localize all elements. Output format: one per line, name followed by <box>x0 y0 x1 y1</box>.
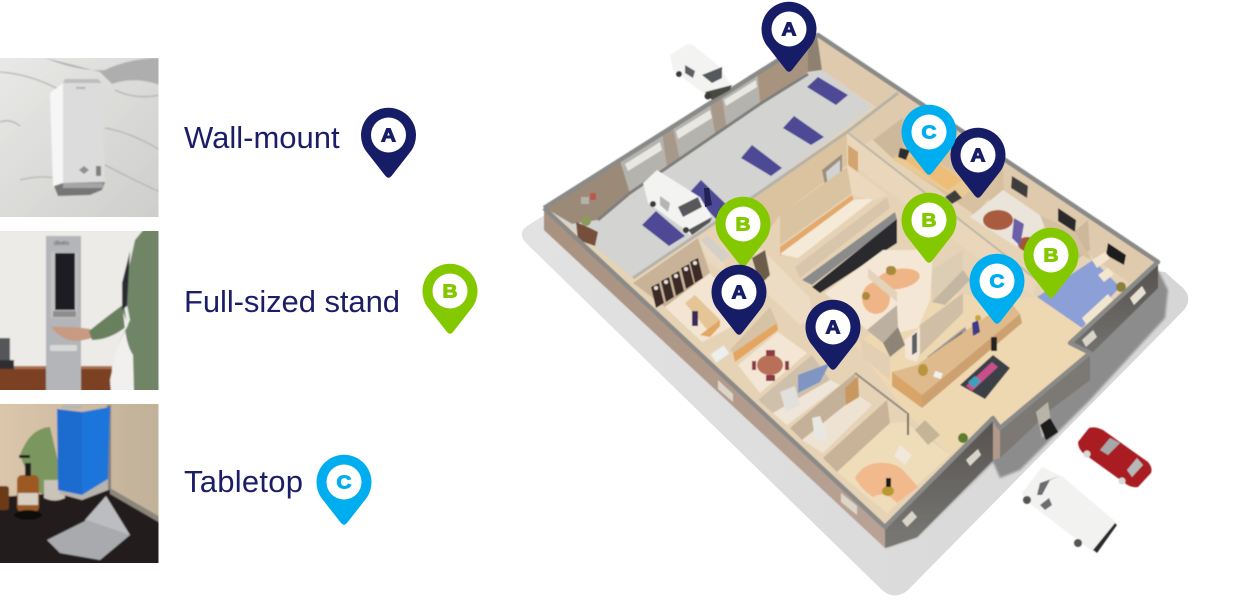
garage back wall and windows <box>620 76 760 193</box>
pin C: tabletop legend: C <box>337 472 351 493</box>
pin C: tabletop legend <box>316 455 372 525</box>
photo: wall-mount dispenser: divés <box>76 85 85 90</box>
pin B: lounge: B <box>1044 245 1058 266</box>
pin B: open office <box>902 193 956 263</box>
label: wall-mount: Wall-mount <box>184 120 340 155</box>
ground slab <box>522 216 1188 596</box>
conference room <box>892 118 1000 215</box>
garage floor <box>553 70 873 278</box>
restroom 1 <box>758 355 830 413</box>
door corridor near pin B <box>698 238 728 275</box>
pin A: restroom <box>806 300 860 370</box>
reception desk <box>892 305 1020 395</box>
lounge blue floor <box>1037 260 1120 328</box>
pin C: reception desk <box>970 254 1024 324</box>
garage corner clutter <box>576 222 598 246</box>
pin A: shelf room <box>712 265 766 335</box>
pin A: restroom: A <box>826 317 840 338</box>
pin A: wall-mount legend <box>361 108 416 178</box>
lobby plant <box>958 433 968 443</box>
pin B: garage door: B <box>736 214 750 235</box>
pin B: open office: B <box>922 210 936 231</box>
storage shelves <box>651 258 703 308</box>
label: full-sized stand: Full-sized stand <box>184 284 400 319</box>
open office floor <box>825 250 933 333</box>
slab shadows <box>885 270 1168 548</box>
photo: tabletop dispenser <box>0 401 162 566</box>
base floor <box>544 35 1158 527</box>
pin A: wall-mount legend: A <box>381 125 396 146</box>
locker room <box>780 167 852 245</box>
pin B: stand legend: B <box>443 281 457 302</box>
pin A: shelf room: A <box>732 282 746 303</box>
label: tabletop: Tabletop <box>184 464 303 499</box>
office lower block <box>867 305 898 343</box>
floor plan: isometric building <box>522 35 1188 596</box>
photo: full-sized stand dispenser: divés <box>54 240 70 247</box>
garage end wall <box>544 160 630 224</box>
exterior brick wall <box>544 208 885 548</box>
pin C: conference room <box>902 105 956 175</box>
shelf room <box>633 238 710 307</box>
pin A: garage corner: A <box>782 19 796 40</box>
garage partition wall <box>753 132 847 240</box>
pin A: garage corner <box>762 2 816 72</box>
pin B: garage door <box>716 197 770 267</box>
van: garage <box>643 170 712 235</box>
outer wall caps <box>544 35 1158 527</box>
garage figure <box>704 188 712 207</box>
pin B: stand legend <box>422 264 478 334</box>
pin B: lounge <box>1024 228 1078 298</box>
meeting room <box>970 190 1050 247</box>
upper right back wall <box>817 35 1158 283</box>
building body <box>544 35 1158 548</box>
pin C: conference room: C <box>922 122 936 143</box>
long central wall <box>845 132 1037 296</box>
partitions near reception <box>932 250 963 302</box>
entrance rug <box>960 355 1010 399</box>
pin A: meeting room: A <box>971 145 985 166</box>
exterior front right walls <box>885 418 993 548</box>
van: top <box>670 44 732 100</box>
garage parking bays <box>642 77 848 246</box>
red car <box>1078 427 1152 487</box>
back wall dividers <box>1073 220 1090 262</box>
pin A: meeting room <box>950 128 1006 198</box>
lobby floor <box>855 290 1090 455</box>
lower lounge room <box>823 400 890 472</box>
pin C: reception desk: C <box>990 271 1004 292</box>
restroom 2 <box>790 373 858 440</box>
photo: full-sized stand dispenser <box>0 228 162 393</box>
corridor walls <box>855 373 907 413</box>
photo: wall-mount dispenser <box>0 55 162 220</box>
brick wall windows <box>841 493 857 515</box>
round table room <box>730 307 777 353</box>
white van bottom <box>1022 467 1117 553</box>
